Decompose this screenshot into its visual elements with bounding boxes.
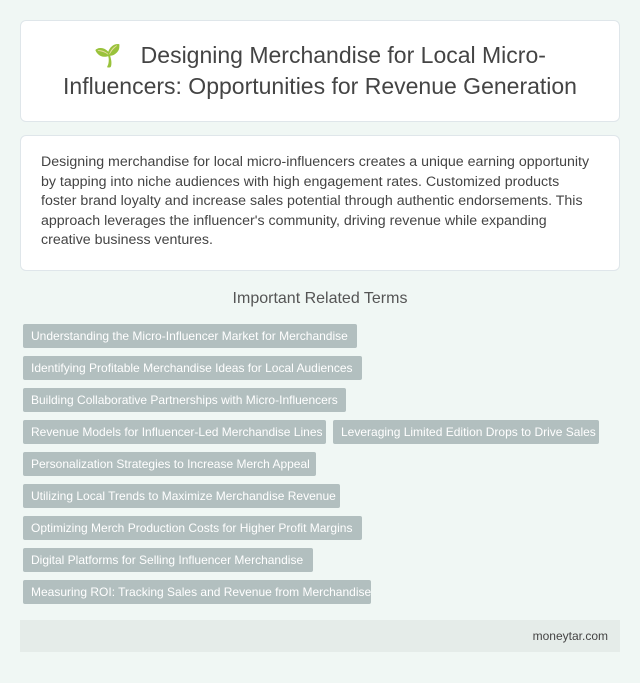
related terms heading: Important Related Terms — [233, 290, 407, 307]
footer: moneytar.com — [533, 629, 608, 643]
tag 6: Personalization Strategies to Increase Merch Appeal — [31, 457, 310, 471]
description: creative business ventures. — [41, 232, 213, 248]
tag 7 — [23, 484, 340, 508]
tag 6 — [23, 452, 316, 476]
tag 9: Digital Platforms for Selling Influencer Merchandise — [31, 553, 303, 567]
tag 1 — [23, 324, 357, 348]
tag 3: Building Collaborative Partnerships with Micro-Influencers — [31, 393, 338, 407]
title: 🌱 Designing Merchandise for Local Micro-Influencers: Opportunities for Revenue Generation — [63, 42, 577, 99]
tag 9 — [23, 548, 313, 572]
footer — [20, 620, 620, 652]
tag 4: Revenue Models for Influencer-Led Merchandise Lines — [31, 425, 322, 439]
tag 2: Identifying Profitable Merchandise Ideas for Local Audiences — [31, 361, 353, 375]
tag 10 — [23, 580, 371, 604]
description — [20, 135, 620, 271]
description: Designing merchandise for local micro-influencers creates a unique earning opportunity — [41, 154, 589, 170]
tag 2 — [23, 356, 362, 380]
tag 4 — [23, 420, 326, 444]
tag 7: Utilizing Local Trends to Maximize Merchandise Revenue — [31, 489, 336, 503]
tag 1: Understanding the Micro-Influencer Market for Merchandise — [31, 329, 348, 343]
description: by tapping into niche audiences with high engagement rates. Customized products — [41, 174, 559, 190]
tags — [23, 324, 599, 604]
tag 8: Optimizing Merch Production Costs for Higher Profit Margins — [31, 521, 352, 535]
tag 3 — [23, 388, 346, 412]
tag 10: Measuring ROI: Tracking Sales and Revenue from Merchandise — [31, 585, 371, 599]
description: approach leverages the influencer's community, driving revenue while expanding — [41, 213, 547, 229]
tag 5 — [333, 420, 599, 444]
title — [20, 20, 620, 122]
tag 5: Leveraging Limited Edition Drops to Drive Sales — [341, 425, 596, 439]
description: foster brand loyalty and increase sales potential through authentic endorsements. This — [41, 193, 583, 209]
tag 8 — [23, 516, 362, 540]
